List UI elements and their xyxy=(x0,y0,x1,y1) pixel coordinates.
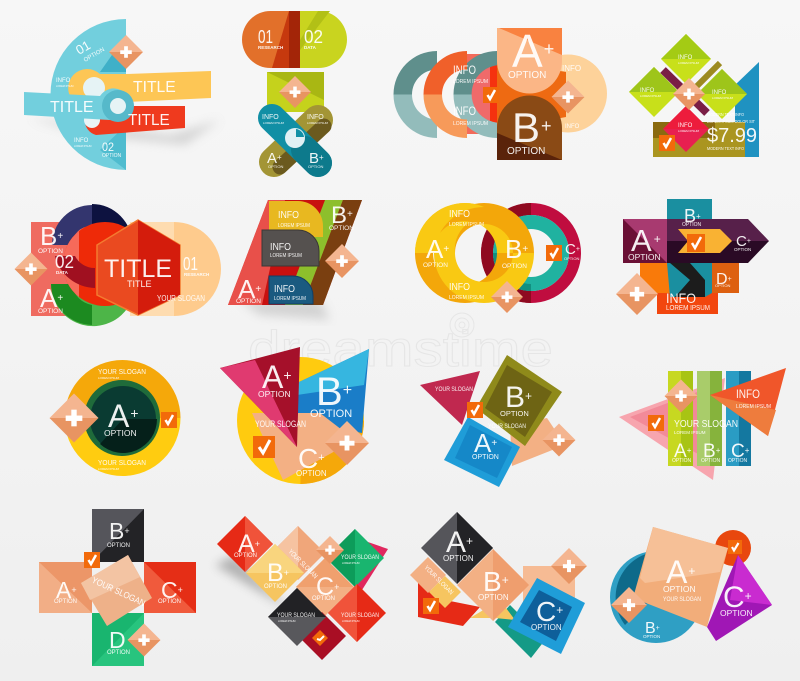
panel: diamonds with price tag: LOREM IPSUM xyxy=(678,61,700,65)
panel: mosaic of diamonds: OPTION xyxy=(234,553,257,559)
panel: rotated squares cluster: + xyxy=(556,603,563,617)
panel: beveled squares: + xyxy=(525,389,532,403)
panel: circle with triangles: OPTION xyxy=(310,408,352,420)
panel: parallelogram with info boxes: + xyxy=(255,284,261,295)
panel: half circle with three title ribbons: INFO xyxy=(56,78,71,84)
panel: mosaic of diamonds: B xyxy=(267,559,284,587)
panel: half rings with A+ and B+ shields: OPTION xyxy=(507,146,545,157)
panel: mosaic of diamonds: YOUR SLOGAN xyxy=(277,613,315,619)
icon: plus diamond xyxy=(109,35,143,69)
panel: half circle with three title ribbons: OPTION xyxy=(102,153,122,159)
panel: pill and crossing capsules: 01 xyxy=(258,27,273,47)
panel: vertical bars with triangles: + xyxy=(687,446,692,455)
panel: circle, rotated square and triangle: + xyxy=(688,564,695,578)
panel: cross of squares: OPTION xyxy=(54,599,77,605)
panel: circle badge A+: YOUR SLOGAN xyxy=(98,458,146,467)
panel: half circle with three title ribbons: LOREM IPSUM xyxy=(74,145,92,148)
panel: pill and crossing capsules: + xyxy=(319,153,324,162)
panel: arrow cluster: B xyxy=(684,206,696,226)
panel: hexagon title with rings: DATA xyxy=(56,270,69,275)
panel: hexagon title with rings: TITLE xyxy=(104,255,172,283)
panel: beveled squares xyxy=(420,355,576,487)
panel: circle badge A+ xyxy=(50,360,180,476)
panel: parallelogram with info boxes: INFO xyxy=(274,284,295,295)
panel: hexagon title with rings: YOUR SLOGAN xyxy=(157,294,205,303)
panel: beveled squares: OPTION xyxy=(472,454,499,461)
panel: circle badge A+: OPTION xyxy=(104,428,137,438)
panel: cross of squares: B xyxy=(109,518,124,544)
panel: beveled squares: B xyxy=(505,381,525,414)
panel: rotated squares cluster: OPTION xyxy=(531,623,562,632)
icon: check box xyxy=(423,598,439,614)
panel: half circle with three title ribbons: TITLE xyxy=(50,99,94,116)
panel: cross of squares: + xyxy=(178,585,183,595)
panel: interlocking rings: C xyxy=(565,241,576,258)
panel: arrow cluster: OPTION xyxy=(682,222,702,228)
panel: half circle with three title ribbons: 02 xyxy=(102,140,114,154)
icon: plus diamond xyxy=(551,548,587,584)
icon: plus diamond xyxy=(673,78,705,110)
icon: plus diamond xyxy=(611,587,647,623)
icon: check box xyxy=(253,436,275,458)
icon: plus diamond xyxy=(50,394,98,442)
panel: circle with triangles: YOUR SLOGAN xyxy=(255,419,306,429)
panel: parallelogram with info boxes: LOREM IPSUM xyxy=(278,223,310,229)
panel: vertical bars with triangles: OPTION xyxy=(701,458,721,464)
icon: plus diamond xyxy=(14,252,47,286)
panel: hexagon title with rings: 01 xyxy=(183,254,198,274)
panel: pill and crossing capsules: LOREM IPSUM xyxy=(307,121,329,125)
panel: interlocking rings: INFO xyxy=(449,209,470,220)
panel: interlocking rings: + xyxy=(443,244,449,255)
panel: mosaic of diamonds: YOUR SLOGAN xyxy=(287,548,318,580)
panel: circle, rotated square and triangle: C xyxy=(723,581,745,614)
panel: circle, rotated square and triangle: YOUR SLOGAN xyxy=(663,596,701,603)
panel: beveled squares: YOUR SLOGAN xyxy=(435,387,473,393)
panel: mosaic of diamonds: OPTION xyxy=(264,584,287,590)
panel: interlocking rings: + xyxy=(522,244,528,255)
panel: pill and crossing capsules: RESEARCH xyxy=(258,45,283,50)
panel: arrow cluster: OPTION xyxy=(734,247,751,252)
panel: arrow cluster: + xyxy=(696,212,701,221)
panel: hexagon title with rings: A xyxy=(40,283,57,313)
panel: circle with triangles: + xyxy=(318,452,325,464)
icon: plus diamond xyxy=(616,273,658,315)
panel: circle with triangles: C xyxy=(298,443,318,474)
panel: parallelogram with info boxes: LOREM IPSUM xyxy=(270,253,302,259)
panel: mosaic of diamonds: LOREM IPSUM xyxy=(342,562,360,565)
panel: cross of squares: YOUR SLOGAN xyxy=(90,575,147,608)
panel: cross of squares: A xyxy=(56,577,71,603)
icon: check box xyxy=(659,135,675,151)
icon: plus diamond xyxy=(664,380,698,412)
panel: half rings with A+ and B+ shields: B xyxy=(512,104,540,151)
panel: cross of squares: + xyxy=(71,585,77,595)
panel: half rings with A+ and B+ shields: INFO xyxy=(565,124,580,130)
icon: plus diamond xyxy=(491,281,523,313)
panel: parallelogram with info boxes xyxy=(228,200,362,320)
panel: pill and crossing capsules: OPTION xyxy=(268,164,283,169)
panel: parallelogram with info boxes: LOREM IPSUM xyxy=(274,296,306,302)
panel: vertical bars with triangles: + xyxy=(716,446,721,455)
panel: cross of squares: OPTION xyxy=(107,543,130,549)
panel: pill and crossing capsules: + xyxy=(277,153,282,162)
panel: interlocking rings: INFO xyxy=(449,282,470,293)
panel: pill and crossing capsules: A xyxy=(267,150,277,167)
panel: mosaic of diamonds: + xyxy=(334,582,339,592)
panel: mosaic of diamonds: YOUR SLOGAN xyxy=(341,555,379,561)
panel: diamonds with price tag: LOREM IPSUM xyxy=(712,96,734,100)
panel: circle with triangles: OPTION xyxy=(258,389,291,399)
panel: circle badge A+: YOUR SLOGAN xyxy=(98,367,146,376)
panel: mosaic of diamonds: YOUR SLOGAN xyxy=(341,613,379,619)
panel: circle, rotated square and triangle: + xyxy=(745,589,752,603)
panel: cross of squares: OPTION xyxy=(107,650,130,656)
panel: arrow cluster: LOREM IPSUM xyxy=(666,303,710,312)
panel: hexagon title with rings xyxy=(14,204,221,326)
panel: half circle with three title ribbons: 01 xyxy=(73,37,93,58)
panel: beveled squares: A xyxy=(474,428,491,458)
panel: hexagon title with rings: + xyxy=(57,293,63,304)
panel: vertical bars with triangles: + xyxy=(745,446,750,455)
panel: rotated squares cluster: C xyxy=(536,596,556,627)
icon: check box xyxy=(687,234,705,252)
panel: mosaic of diamonds: LOREM IPSUM xyxy=(342,620,360,623)
panel: cross of squares: C xyxy=(161,577,178,603)
panel: rotated squares cluster xyxy=(410,512,587,658)
watermark: dreamstime xyxy=(248,321,553,377)
panel: parallelogram with info boxes: B xyxy=(331,202,347,229)
panel: circle badge A+: LOREM IPSUM xyxy=(98,376,120,380)
panel: circle with triangles: B xyxy=(316,370,343,414)
panel: vertical bars with triangles xyxy=(619,368,786,480)
panel: diamonds with price tag: LOREM IPSUM xyxy=(678,129,700,133)
panel: pill and crossing capsules: DATA xyxy=(304,45,317,50)
icon: check box xyxy=(161,412,177,428)
panel: parallelogram with info boxes: INFO xyxy=(278,210,299,221)
panel: half rings with A+ and B+ shields: + xyxy=(541,116,552,136)
panel: circle badge A+: + xyxy=(130,405,139,421)
panel: interlocking rings: OPTION xyxy=(502,263,527,270)
panel: vertical bars with triangles: A xyxy=(674,441,687,462)
panel: interlocking rings: B xyxy=(505,234,522,264)
panel: parallelogram with info boxes: + xyxy=(347,209,353,220)
panel: parallelogram with info boxes: OPTION xyxy=(236,298,261,305)
panel: interlocking rings: A xyxy=(426,234,443,264)
panel: half circle with three title ribbons xyxy=(24,19,220,170)
panel: arrow cluster: D xyxy=(716,271,728,288)
icon: check box xyxy=(483,87,499,103)
icon: plus diamond xyxy=(128,624,160,656)
panel: mosaic of diamonds: + xyxy=(255,539,260,549)
icon: check box xyxy=(648,415,664,431)
panel: half rings with A+ and B+ shields: LOREM IPSUM xyxy=(453,79,488,85)
icon: plus diamond xyxy=(279,76,311,108)
panel: pill and crossing capsules: LOREM IPSUM xyxy=(263,121,285,125)
panel: arrow cluster: A xyxy=(631,223,652,258)
panel: half circle with three title ribbons: OPTION xyxy=(83,47,106,64)
panel: arrow cluster xyxy=(616,199,769,315)
panel: diamonds with price tag: INFO xyxy=(640,88,655,94)
icon: check box xyxy=(312,630,328,646)
panel: interlocking rings: OPTION xyxy=(564,256,579,261)
panel: vertical bars with triangles: YOUR SLOGAN xyxy=(674,418,738,430)
panel: cross of squares: D xyxy=(109,627,126,653)
panel: vertical bars with triangles: OPTION xyxy=(728,458,748,464)
panel: circle, rotated square and triangle: A xyxy=(666,554,687,590)
icon: plus diamond xyxy=(316,536,344,564)
panel: circle badge A+: LOREM IPSUM xyxy=(98,467,120,471)
panel: hexagon title with rings: 02 xyxy=(55,252,74,272)
panel: parallelogram with info boxes: OPTION xyxy=(329,225,354,232)
panel: interlocking rings: LOREM IPSUM xyxy=(449,295,484,301)
panel: beveled squares: + xyxy=(491,438,497,449)
panel: half rings with A+ and B+ shields: INFO xyxy=(453,63,476,77)
panel: circle, rotated square and triangle: B xyxy=(645,620,656,637)
panel: beveled squares: OPTION xyxy=(500,409,529,418)
panel: rotated squares cluster: + xyxy=(502,573,509,587)
panel: mosaic of diamonds xyxy=(215,516,388,660)
panel: rotated squares cluster: YOUR SLOGAN xyxy=(423,564,455,596)
panel: pill and crossing capsules: 02 xyxy=(304,27,323,47)
icon: check box xyxy=(728,540,742,554)
panel: interlocking rings: + xyxy=(576,246,580,253)
panel: hexagon title with rings: OPTION xyxy=(38,248,63,255)
panel: hexagon title with rings: TITLE xyxy=(127,279,152,289)
panel: interlocking rings: LOREM IPSUM xyxy=(449,222,484,228)
panel: diamonds with price tag: MODERN TEXT INFO xyxy=(707,146,744,151)
panel: rotated squares cluster: + xyxy=(466,534,473,548)
panel: interlocking rings xyxy=(415,203,580,313)
panel: parallelogram with info boxes: INFO xyxy=(270,242,291,253)
panel: vertical bars with triangles: LOREM IPSUM xyxy=(736,404,771,410)
panel: half rings with A+ and B+ shields: LOREM IPSUM xyxy=(453,121,488,127)
panel: circle badge A+: A xyxy=(108,398,129,434)
panel: pill and crossing capsules: B xyxy=(309,150,319,167)
panel: circle with triangles: A xyxy=(262,359,283,395)
panel: vertical bars with triangles: C xyxy=(731,441,745,462)
panel: arrow cluster: OPTION xyxy=(715,283,730,288)
panel: cross of squares xyxy=(39,509,196,666)
panel: diamonds with price tag: LOREM IPSUM DOLOR SIT xyxy=(707,119,755,124)
panel: half rings with A+ and B+ shields: A xyxy=(512,25,543,77)
panel: rotated squares cluster: OPTION xyxy=(443,554,474,563)
panel: mosaic of diamonds: + xyxy=(284,568,289,578)
panel: arrow cluster: OPTION xyxy=(628,252,661,262)
panel: hexagon title with rings: RESEARCH xyxy=(184,272,209,277)
panel: half circle with three title ribbons: INFO xyxy=(74,138,89,144)
panel: parallelogram with info boxes: A xyxy=(238,274,255,304)
panel: mosaic of diamonds: C xyxy=(316,573,334,601)
panel: mosaic of diamonds: A xyxy=(238,530,255,558)
panel: hexagon title with rings: OPTION xyxy=(38,308,63,315)
panel: rotated squares cluster: A xyxy=(446,526,466,559)
icon: check box xyxy=(467,402,483,418)
panel: vertical bars with triangles: INFO xyxy=(736,387,760,401)
panel: arrow cluster: + xyxy=(654,232,661,246)
panel: pill and crossing capsules: INFO xyxy=(262,114,279,121)
panel: arrow cluster: C xyxy=(736,233,747,250)
panel: diamonds with price tag: INFO xyxy=(678,123,693,129)
panel: vertical bars with triangles: LOREM IPSUM xyxy=(674,430,706,435)
panel: circle, rotated square and triangle: OPTION xyxy=(663,584,696,594)
panel: half rings with A+ and B+ shields xyxy=(394,25,607,160)
panel: mosaic of diamonds: LOREM IPSUM xyxy=(278,620,296,623)
panel: circle, rotated square and triangle xyxy=(610,527,772,643)
panel: cross of squares: OPTION xyxy=(158,599,181,605)
panel: circle with triangles xyxy=(220,347,369,484)
panel: circle, rotated square and triangle: OPTION xyxy=(643,634,660,639)
icon: plus diamond xyxy=(325,244,359,278)
panel: circle with triangles: OPTION xyxy=(296,469,327,478)
panel: pill and crossing capsules: INFO xyxy=(307,114,324,121)
panel: vertical bars with triangles: OPTION xyxy=(672,458,692,464)
panel: half circle with three title ribbons: TITLE xyxy=(133,79,176,96)
panel: half rings with A+ and B+ shields: OPTION xyxy=(508,70,546,81)
panel: circle with triangles: + xyxy=(343,382,352,399)
panel: diamonds with price tag: MODERN TEXT INFO xyxy=(707,112,744,117)
panel: diamonds with price tag: LOREM IPSUM xyxy=(640,94,662,98)
panel: pill and crossing capsules xyxy=(242,11,347,169)
panel: diamonds with price tag: $7.99 xyxy=(707,125,757,147)
panel: arrow cluster: + xyxy=(728,276,732,283)
panel: half rings with A+ and B+ shields: INFO xyxy=(562,64,581,73)
panel: vertical bars with triangles: B xyxy=(703,441,716,462)
panel: hexagon title with rings: B xyxy=(40,221,57,251)
icon: check box xyxy=(546,245,562,261)
icon: plus diamond xyxy=(542,424,576,456)
panel: mosaic of diamonds: OPTION xyxy=(312,596,335,602)
panel: circle with triangles: + xyxy=(283,367,292,383)
panel: circle, rotated square and triangle: OPTION xyxy=(720,608,753,618)
panel: half circle with three title ribbons: TITLE xyxy=(128,112,170,129)
panel: interlocking rings: OPTION xyxy=(423,262,448,269)
icon: check box xyxy=(84,552,100,568)
panel: cross of squares: + xyxy=(124,526,130,536)
panel: rotated squares cluster: OPTION xyxy=(478,593,509,602)
panel: diamonds with price tag: INFO xyxy=(678,55,693,61)
panel: half rings with A+ and B+ shields: INFO xyxy=(453,104,476,118)
icon: plus diamond xyxy=(552,80,584,114)
panel: half rings with A+ and B+ shields: + xyxy=(544,39,554,59)
panel: rotated squares cluster: B xyxy=(483,566,502,597)
panel: arrow cluster: + xyxy=(747,238,751,245)
panel: half circle with three title ribbons: LOREM IPSUM xyxy=(56,85,74,88)
panel: diamonds with price tag xyxy=(629,34,759,157)
icon: plus diamond xyxy=(325,421,369,465)
panel: beveled squares: YOUR SLOGAN xyxy=(488,424,526,430)
panel: pill and crossing capsules: OPTION xyxy=(308,164,323,169)
panel: diamonds with price tag: INFO xyxy=(712,90,727,96)
panel: arrow cluster: INFO xyxy=(666,290,696,306)
panel: circle, rotated square and triangle: + xyxy=(656,625,660,632)
panel: hexagon title with rings: + xyxy=(57,231,63,242)
